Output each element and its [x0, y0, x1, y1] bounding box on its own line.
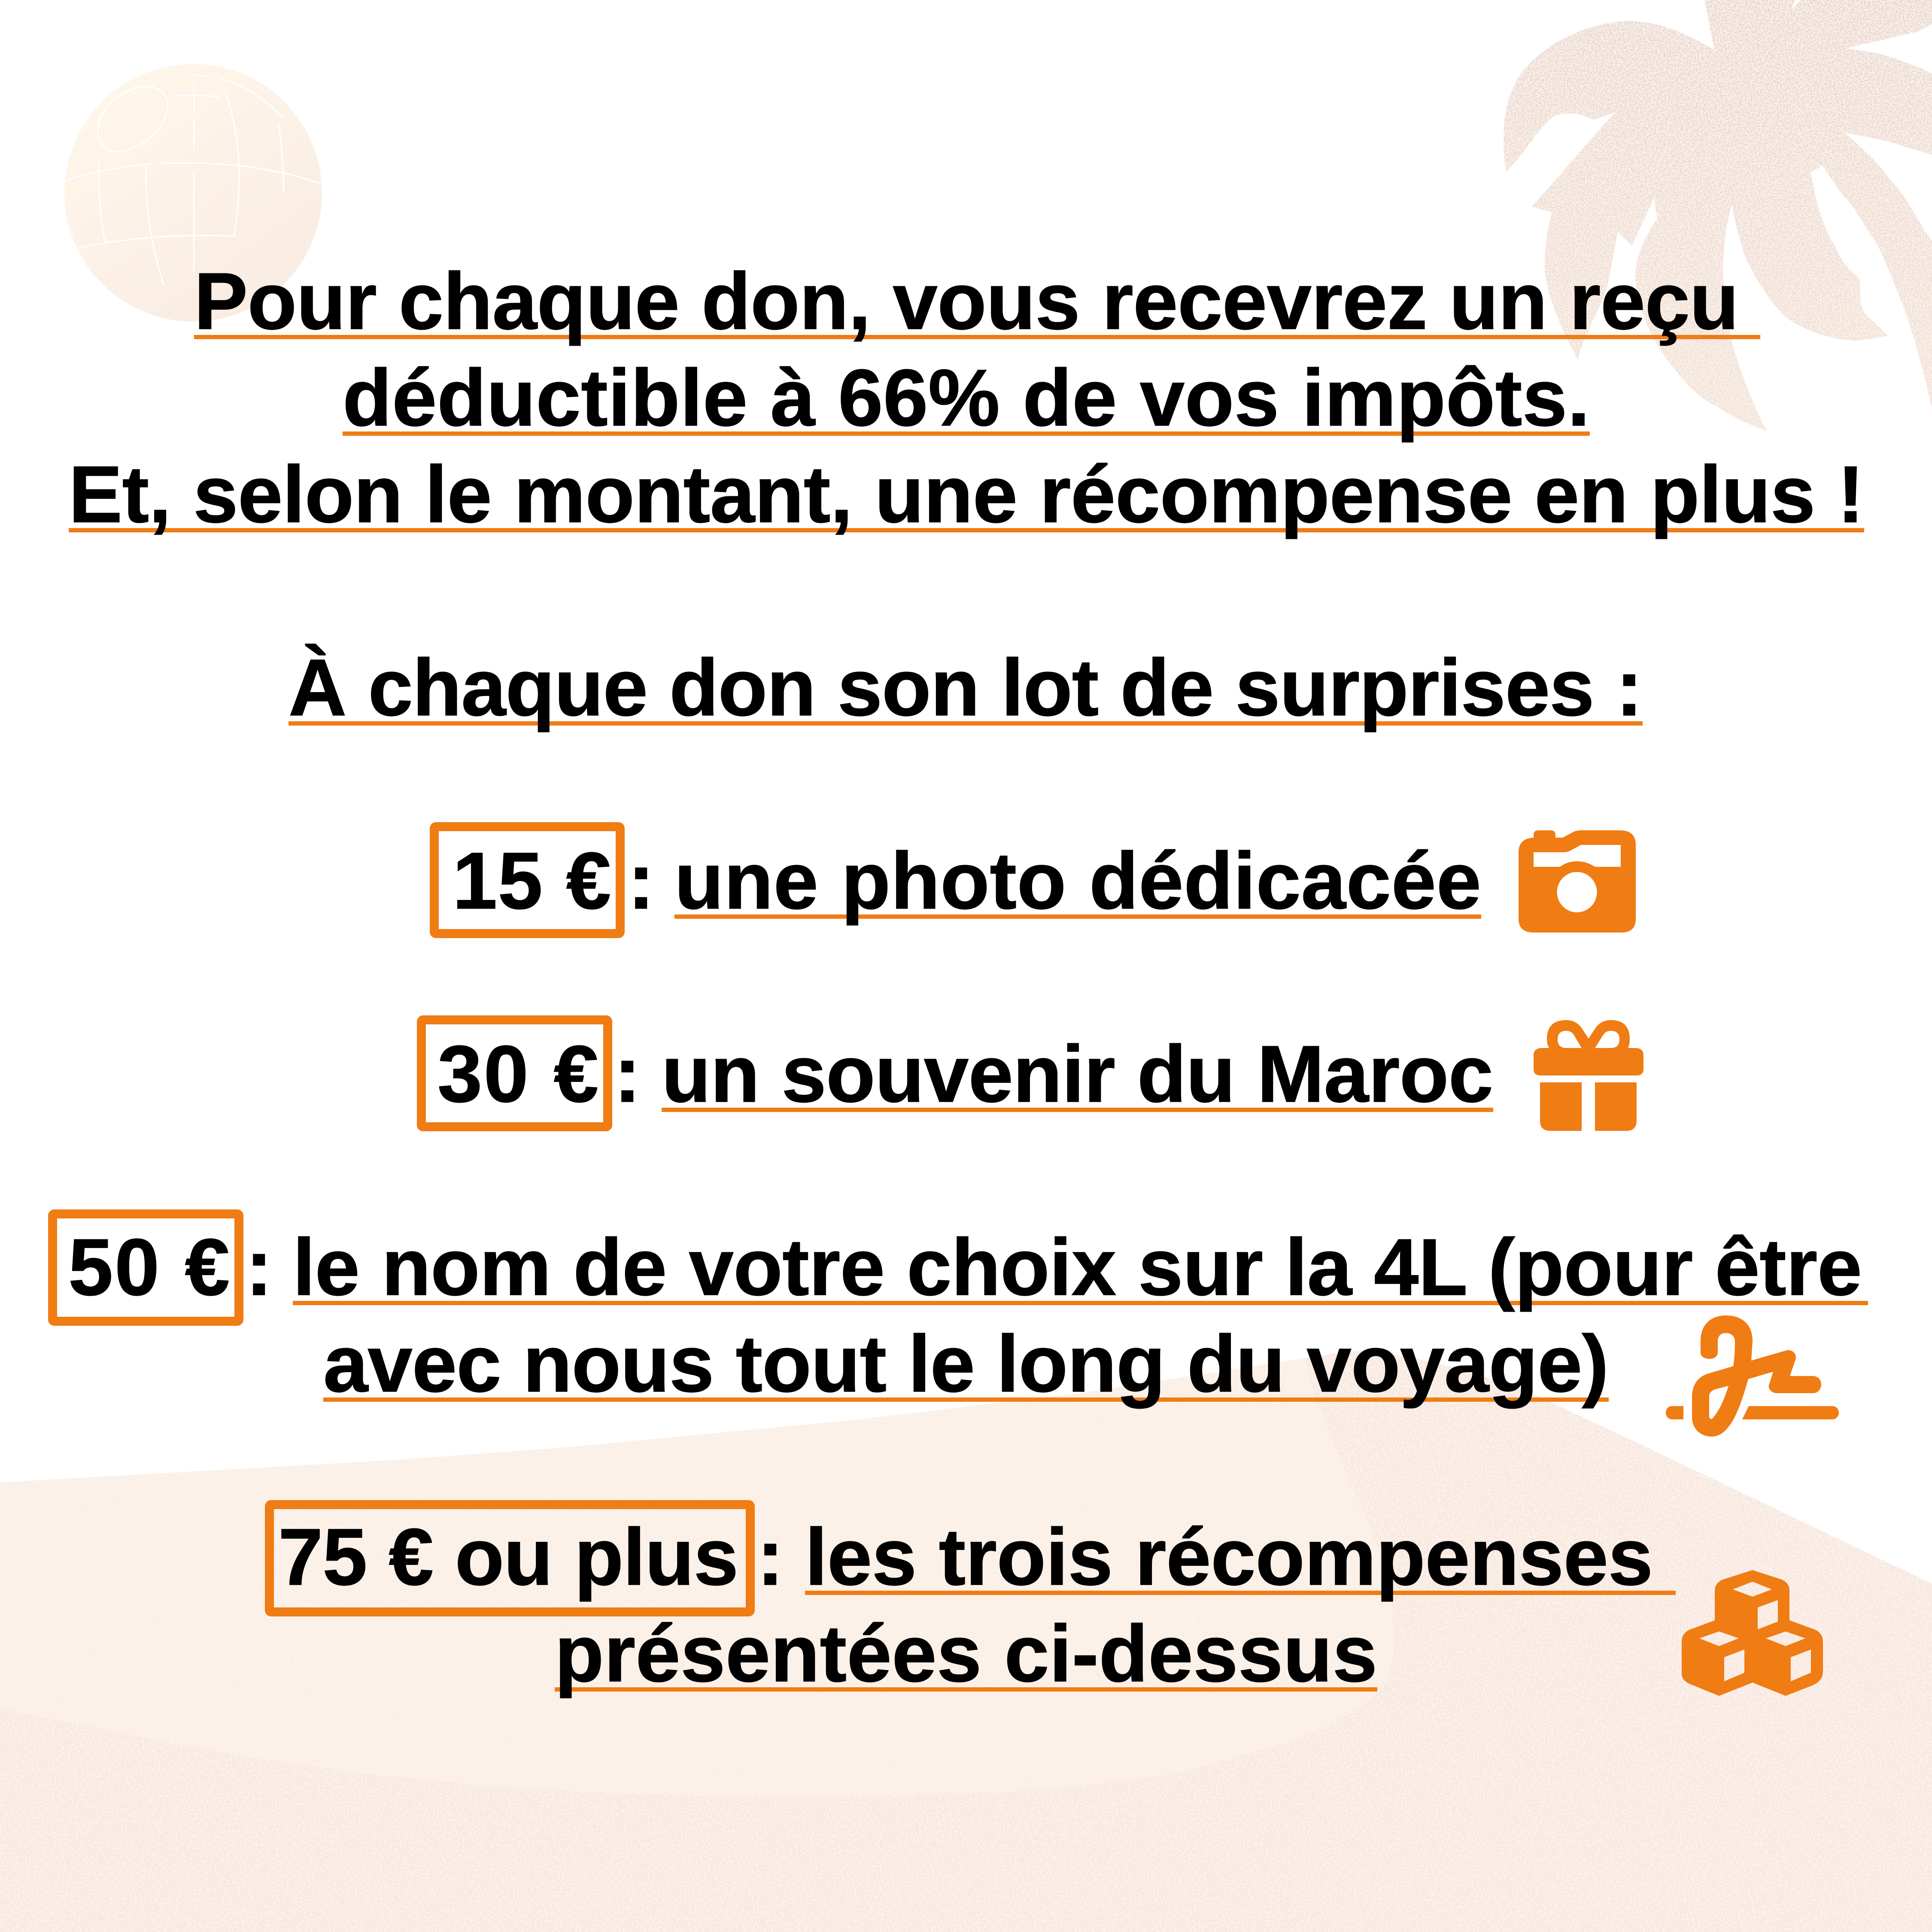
colon: :	[628, 835, 654, 926]
reward row: 50 euros	[52, 1214, 1868, 1437]
underline	[674, 914, 1481, 919]
underline line 1	[805, 1591, 1676, 1595]
icon: camera	[1519, 830, 1636, 933]
price box 75	[270, 1504, 750, 1612]
reward row: 75 euros or more	[270, 1504, 1823, 1698]
reward text line 2: présentées ci-dessus	[555, 1608, 1377, 1698]
background: moon planet with line details	[64, 64, 322, 322]
reward text line 2: avec nous tout le long du voyage)	[323, 1318, 1609, 1409]
underline line 2	[555, 1687, 1377, 1692]
price 50: 50 €	[68, 1222, 230, 1312]
background: palm tree silhouette	[1504, 0, 1932, 431]
section heading: À chaque don son lot de surprises :	[289, 642, 1643, 732]
price box 50	[52, 1214, 239, 1321]
price 15: 15 €	[453, 835, 611, 926]
icon: blocks	[1682, 1570, 1823, 1696]
price box 15	[434, 827, 620, 933]
icon: gift	[1534, 1020, 1643, 1131]
underline line 1	[293, 1301, 1868, 1305]
reward text: un souvenir du Maroc	[662, 1029, 1493, 1119]
price 30: 30 €	[437, 1029, 598, 1119]
reward text: une photo dédicacée	[674, 835, 1481, 926]
reward row: 15 euros	[434, 827, 1636, 933]
colon: :	[757, 1512, 784, 1602]
reward text line 1: les trois récompenses	[805, 1512, 1653, 1602]
intro line 3: Et, selon le montant, une récompense en plus !	[69, 449, 1864, 539]
intro line 1: Pour chaque don, vous recevrez un reçu	[194, 256, 1739, 346]
colon: :	[246, 1222, 272, 1312]
underline line 2	[323, 1397, 1609, 1402]
icon: signature	[1666, 1315, 1839, 1437]
underline	[662, 1108, 1493, 1112]
colon: :	[614, 1029, 641, 1119]
background: sand dunes	[0, 1351, 1932, 1932]
price 75 or more: 75 € ou plus	[278, 1512, 738, 1602]
reward row: 30 euros	[422, 1020, 1643, 1131]
intro line 2: déductible à 66% de vos impôts.	[343, 352, 1590, 443]
reward text line 1: le nom de votre choix sur la 4L (pour être	[293, 1222, 1862, 1312]
price box 30	[422, 1020, 608, 1127]
